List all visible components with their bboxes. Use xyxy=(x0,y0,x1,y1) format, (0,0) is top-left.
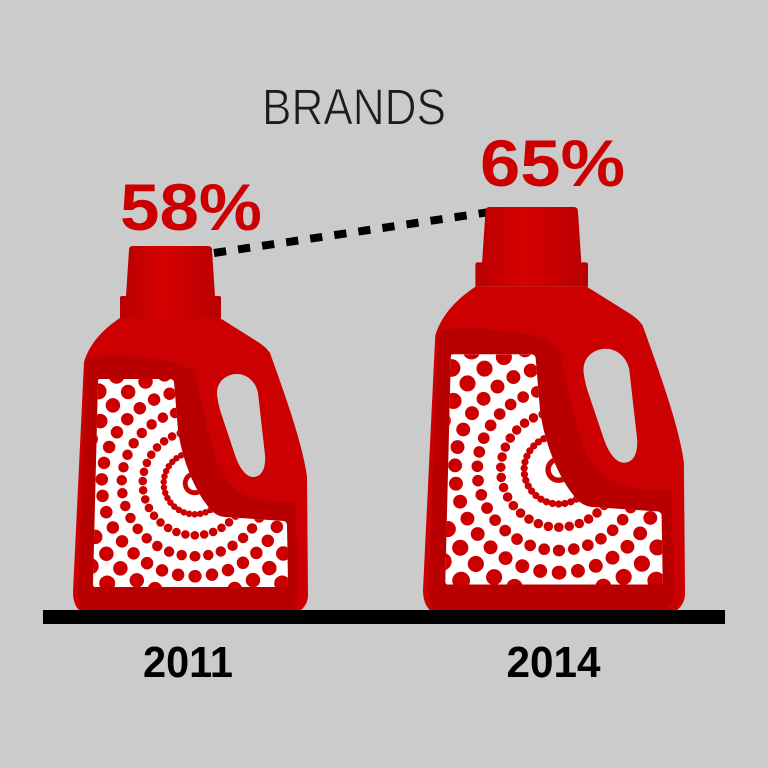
year label 2014: 2014 xyxy=(506,638,601,687)
bottle cap xyxy=(475,207,588,287)
white label xyxy=(445,354,663,585)
title: BRANDS xyxy=(262,78,446,136)
bottle cap xyxy=(120,246,221,318)
baseline bar xyxy=(43,610,725,624)
year label 2011: 2011 xyxy=(143,638,233,687)
white label xyxy=(93,379,288,587)
bottle 2014 xyxy=(423,207,685,610)
concentric dot pattern xyxy=(446,354,663,584)
infographic xyxy=(43,89,725,678)
darker label panel xyxy=(429,328,674,610)
dashed trend line xyxy=(214,212,490,253)
concentric dot pattern xyxy=(93,379,288,587)
value 2014: 65% xyxy=(480,126,625,200)
bottle 2011 xyxy=(73,246,308,610)
darker label panel xyxy=(78,356,298,610)
value 2011: 58% xyxy=(120,170,262,244)
bottle body with handle hole xyxy=(423,287,685,610)
bottle body with handle hole xyxy=(73,318,308,610)
